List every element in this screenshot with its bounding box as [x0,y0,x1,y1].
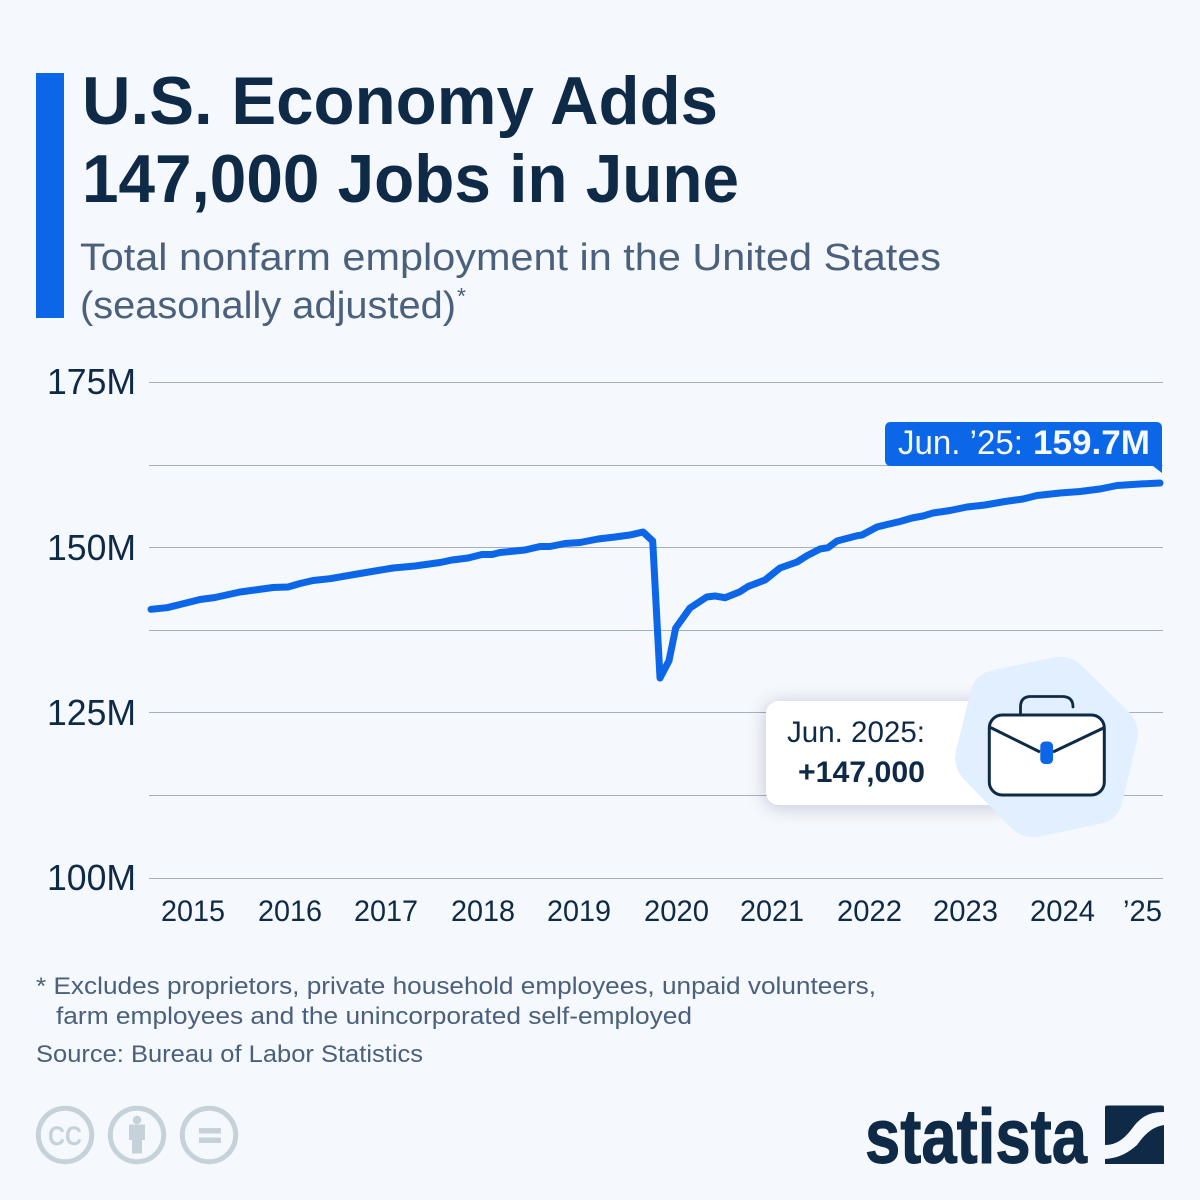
x axis labels: 2022 [837,895,902,928]
icon: attribution [110,1108,164,1162]
callout: monthly jobs added: Jun. 2025: [787,716,925,749]
subtitle: Total nonfarm employment in the United States [80,237,941,279]
chart: total nonfarm employment [47,361,1163,928]
accent bar [36,73,64,318]
x axis labels: 2017 [354,895,418,928]
callout: monthly jobs added [766,701,1016,805]
callout: latest value label [885,422,1162,473]
x axis labels [161,895,1162,928]
y axis labels [47,361,136,898]
source: Source: Bureau of Labor Statistics [36,1041,423,1068]
y axis labels: 100M [47,857,136,898]
employment line [151,483,1160,678]
x axis labels: 2021 [740,895,804,928]
x axis labels: 2024 [1030,895,1095,928]
y axis labels: 150M [47,527,136,568]
callout: monthly jobs added: +147,000 [798,756,925,789]
icon: creative commons [38,1108,92,1162]
y axis labels: 125M [47,692,136,733]
icon: creative commons: CC [48,1121,82,1151]
x axis labels: 2023 [933,895,998,928]
x axis labels: 2018 [451,895,515,928]
x axis labels: 2019 [547,895,611,928]
x axis labels: 2015 [161,895,225,928]
x axis labels: 2016 [258,895,322,928]
title [82,63,739,217]
footnote [36,973,876,1030]
x axis labels: 2020 [644,895,709,928]
subtitle: (seasonally adjusted) [80,285,456,327]
icon: no derivatives [182,1108,236,1162]
x axis labels: ’25 [1123,895,1162,928]
subtitle: * [457,283,466,309]
subtitle [80,237,941,327]
title: 147,000 Jobs in June [82,141,739,217]
callout: latest value label: 159.7M [1033,424,1150,462]
footnote: * Excludes proprietors, private household employees, unpaid volunteers, [36,973,876,1000]
logo: statista: statista [865,1094,1088,1180]
footnote: farm employees and the unincorporated self-employed [56,1003,692,1030]
title: U.S. Economy Adds [82,63,718,139]
callout: latest value label: Jun. ’25: [898,424,1023,462]
icon: briefcase [955,657,1138,837]
y axis labels: 175M [47,361,136,402]
